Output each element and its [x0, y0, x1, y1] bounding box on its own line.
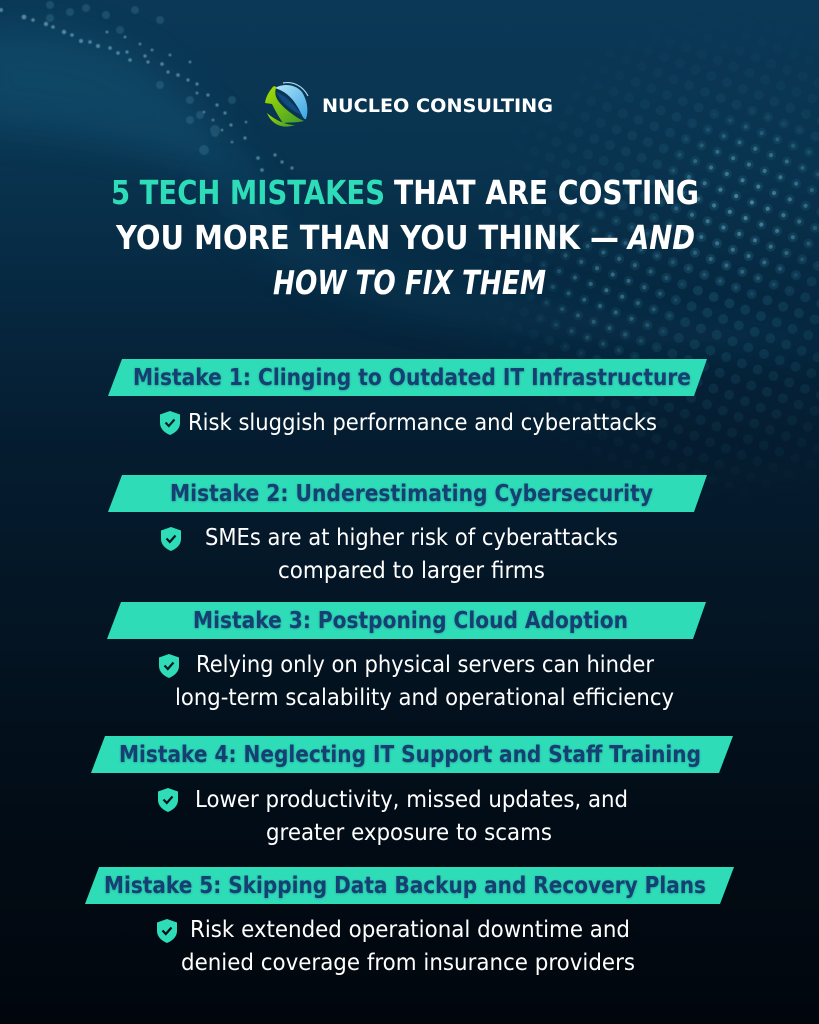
- heading band 4: [91, 736, 733, 773]
- body text 4: greater exposure to scams: [266, 820, 552, 846]
- heading band 2: [108, 475, 707, 512]
- heading band 4: Mistake 4: Neglecting IT Support and Staff Training: [119, 742, 701, 768]
- body text 5: denied coverage from insurance providers: [181, 950, 635, 976]
- panel: mistake 4: [91, 736, 733, 846]
- body text 4: [195, 787, 628, 846]
- title: YOU MORE THAN YOU THINK —: [115, 218, 619, 257]
- icon: shield check: [157, 919, 177, 943]
- heading band 2: Mistake 2: Underestimating Cybersecurity: [170, 481, 653, 507]
- panel: mistake 2: [108, 475, 707, 584]
- logo: [265, 83, 553, 127]
- title: AND: [626, 218, 695, 257]
- icon: logo globe: [265, 83, 308, 127]
- body text 4: Lower productivity, missed updates, and: [195, 787, 628, 813]
- title: THAT ARE COSTING: [394, 173, 699, 212]
- heading band 3: [107, 602, 706, 639]
- body text 3: Relying only on physical servers can hinder: [196, 652, 654, 678]
- body text 1: Risk sluggish performance and cyberattacks: [188, 410, 657, 436]
- body text 5: Risk extended operational downtime and: [190, 917, 630, 943]
- body text 3: long-term scalability and operational efficiency: [175, 685, 674, 711]
- panel: mistake 3: [107, 602, 706, 711]
- panel: mistake 1: [108, 359, 707, 436]
- heading band 5: [85, 867, 734, 904]
- icon: shield check: [160, 411, 180, 435]
- body text 3: [175, 652, 674, 711]
- panel: mistake 5: [85, 867, 734, 976]
- heading band 3: Mistake 3: Postponing Cloud Adoption: [193, 608, 628, 634]
- icon: shield check: [161, 527, 181, 551]
- body text 2: [205, 525, 618, 584]
- icon: shield check: [158, 788, 178, 812]
- title: [111, 173, 699, 302]
- body text 2: SMEs are at higher risk of cyberattacks: [205, 525, 618, 551]
- body text 2: compared to larger firms: [278, 558, 545, 584]
- heading band 1: [108, 359, 707, 396]
- heading band 5: Mistake 5: Skipping Data Backup and Recovery Plans: [104, 873, 706, 899]
- logo wordmark: NUCLEO CONSULTING: [322, 95, 553, 117]
- heading band 1: Mistake 1: Clinging to Outdated IT Infrastructure: [133, 365, 691, 391]
- body text 5: [181, 917, 635, 976]
- title: 5 TECH MISTAKES: [111, 173, 385, 212]
- title: HOW TO FIX THEM: [273, 263, 546, 302]
- icon: shield check: [159, 654, 179, 678]
